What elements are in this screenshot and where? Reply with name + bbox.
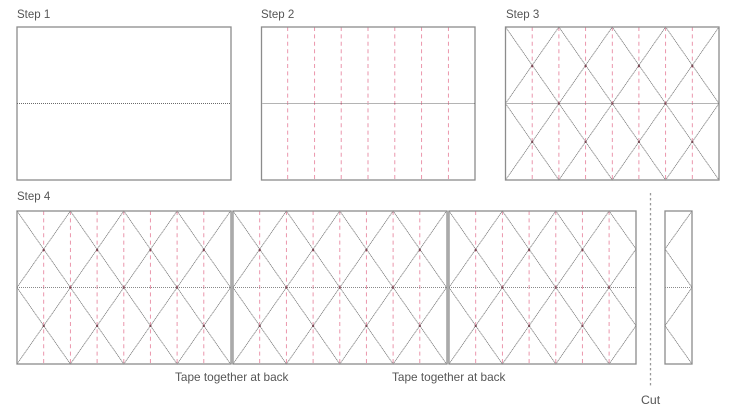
panel: step 3 sheet with diagonal folds <box>506 27 719 180</box>
heading: step 3: Step 3 <box>506 9 539 21</box>
seams: taped joins between sheets <box>232 211 448 364</box>
label: cut: Cut <box>641 393 661 407</box>
label: second tape note: Tape together at back <box>392 370 506 384</box>
panel: step 4 first sheet <box>17 211 231 364</box>
cut line <box>650 193 652 388</box>
panel: step 1 sheet with horizontal fold <box>17 27 231 180</box>
panel: step 2 sheet with vertical folds <box>262 27 475 180</box>
heading: step 2: Step 2 <box>261 9 294 21</box>
panel: step 4 second sheet <box>233 211 447 364</box>
label: first tape note: Tape together at back <box>175 370 289 384</box>
panel: step 4 third sheet, trimmed <box>449 211 636 364</box>
heading: step 1: Step 1 <box>17 9 50 21</box>
panel: cut-off strip <box>665 211 692 364</box>
heading: step 4: Step 4 <box>17 191 51 203</box>
